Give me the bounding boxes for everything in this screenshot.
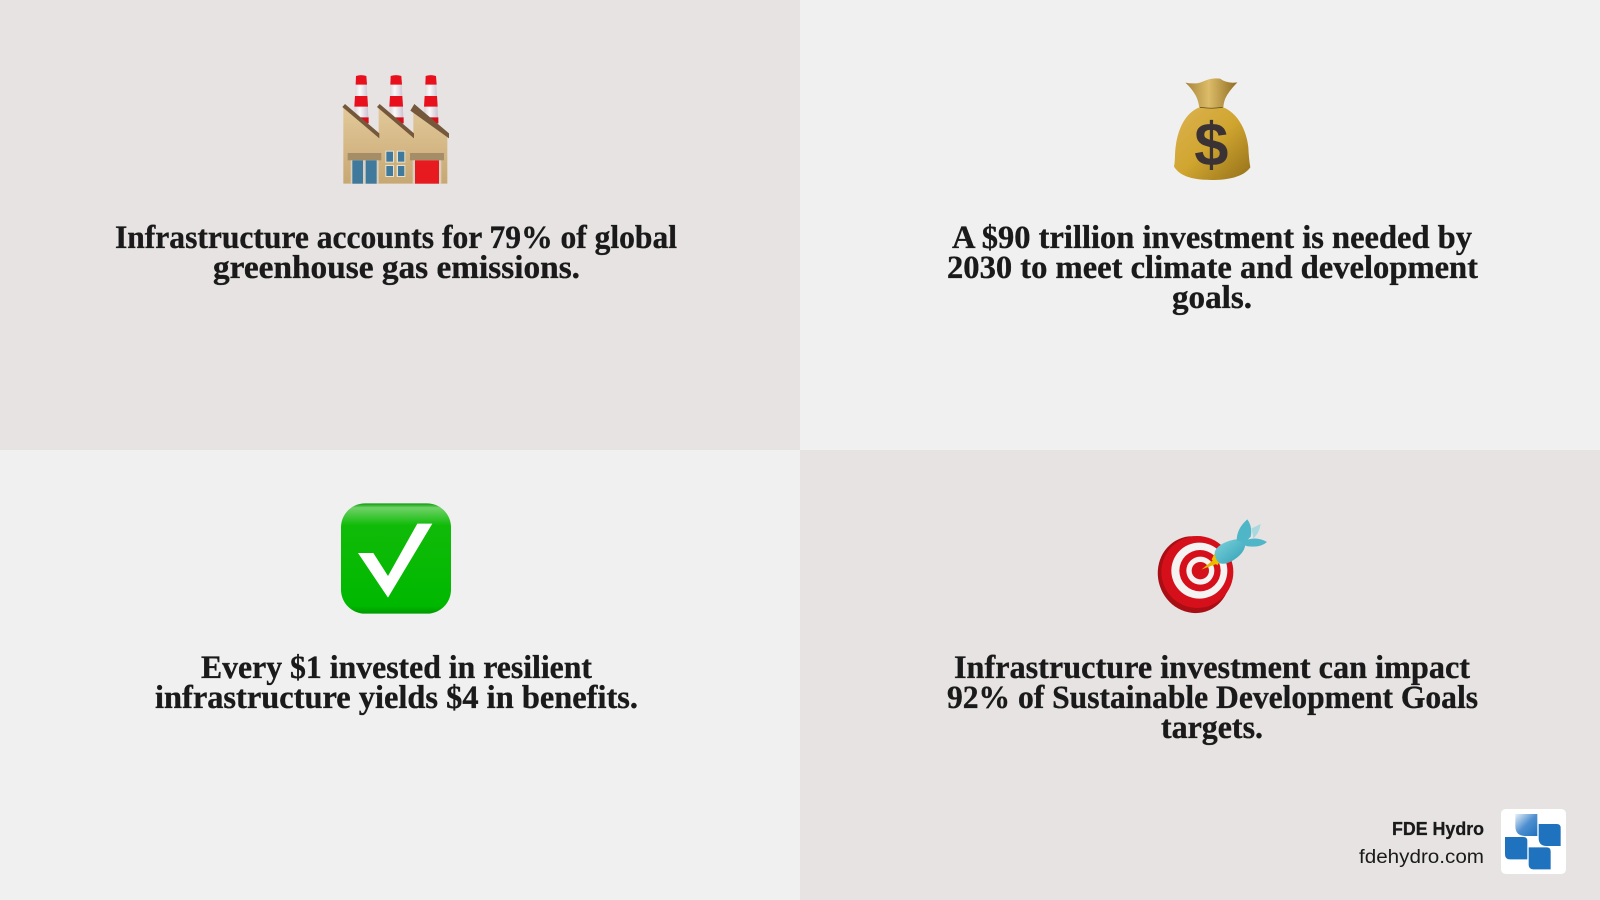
panel: investment — [800, 0, 1600, 450]
text: investment statistic — [947, 220, 1478, 316]
text: emissions statistic: Infrastructure accounts for 79% of global — [115, 220, 677, 256]
text: goals statistic: targets. — [1161, 710, 1263, 746]
text: benefits statistic: infrastructure yields $4 in benefits. — [155, 680, 638, 716]
panel: goals — [800, 450, 1600, 900]
text: benefits statistic: Every $1 invested in resilient — [201, 650, 592, 686]
panel: benefits — [0, 450, 800, 900]
text: emissions statistic: greenhouse gas emissions. — [213, 250, 580, 286]
text: goals statistic — [947, 650, 1478, 746]
brand: FDE Hydro name and URL — [1359, 818, 1484, 868]
text: investment statistic: 2030 to meet climate and development — [947, 250, 1478, 286]
brand: FDE Hydro name and URL: fdehydro.com — [1359, 847, 1484, 868]
panel: emissions — [0, 0, 800, 450]
icon: dart target — [1148, 519, 1267, 623]
icon: money bag — [1174, 78, 1250, 180]
icon: money bag: $ — [1194, 109, 1228, 178]
icon: check mark — [341, 503, 451, 614]
icon: factory — [342, 75, 449, 184]
logo: FDE Hydro — [1501, 809, 1566, 874]
text: goals statistic: Infrastructure investment can impact — [954, 650, 1470, 686]
brand: FDE Hydro name and URL: FDE Hydro — [1392, 818, 1484, 839]
text: investment statistic: goals. — [1172, 280, 1252, 316]
text: benefits statistic — [155, 650, 638, 716]
text: goals statistic: 92% of Sustainable Development Goals — [947, 680, 1478, 716]
text: investment statistic: A $90 trillion investment is needed by — [952, 220, 1472, 256]
text: emissions statistic — [115, 220, 677, 286]
